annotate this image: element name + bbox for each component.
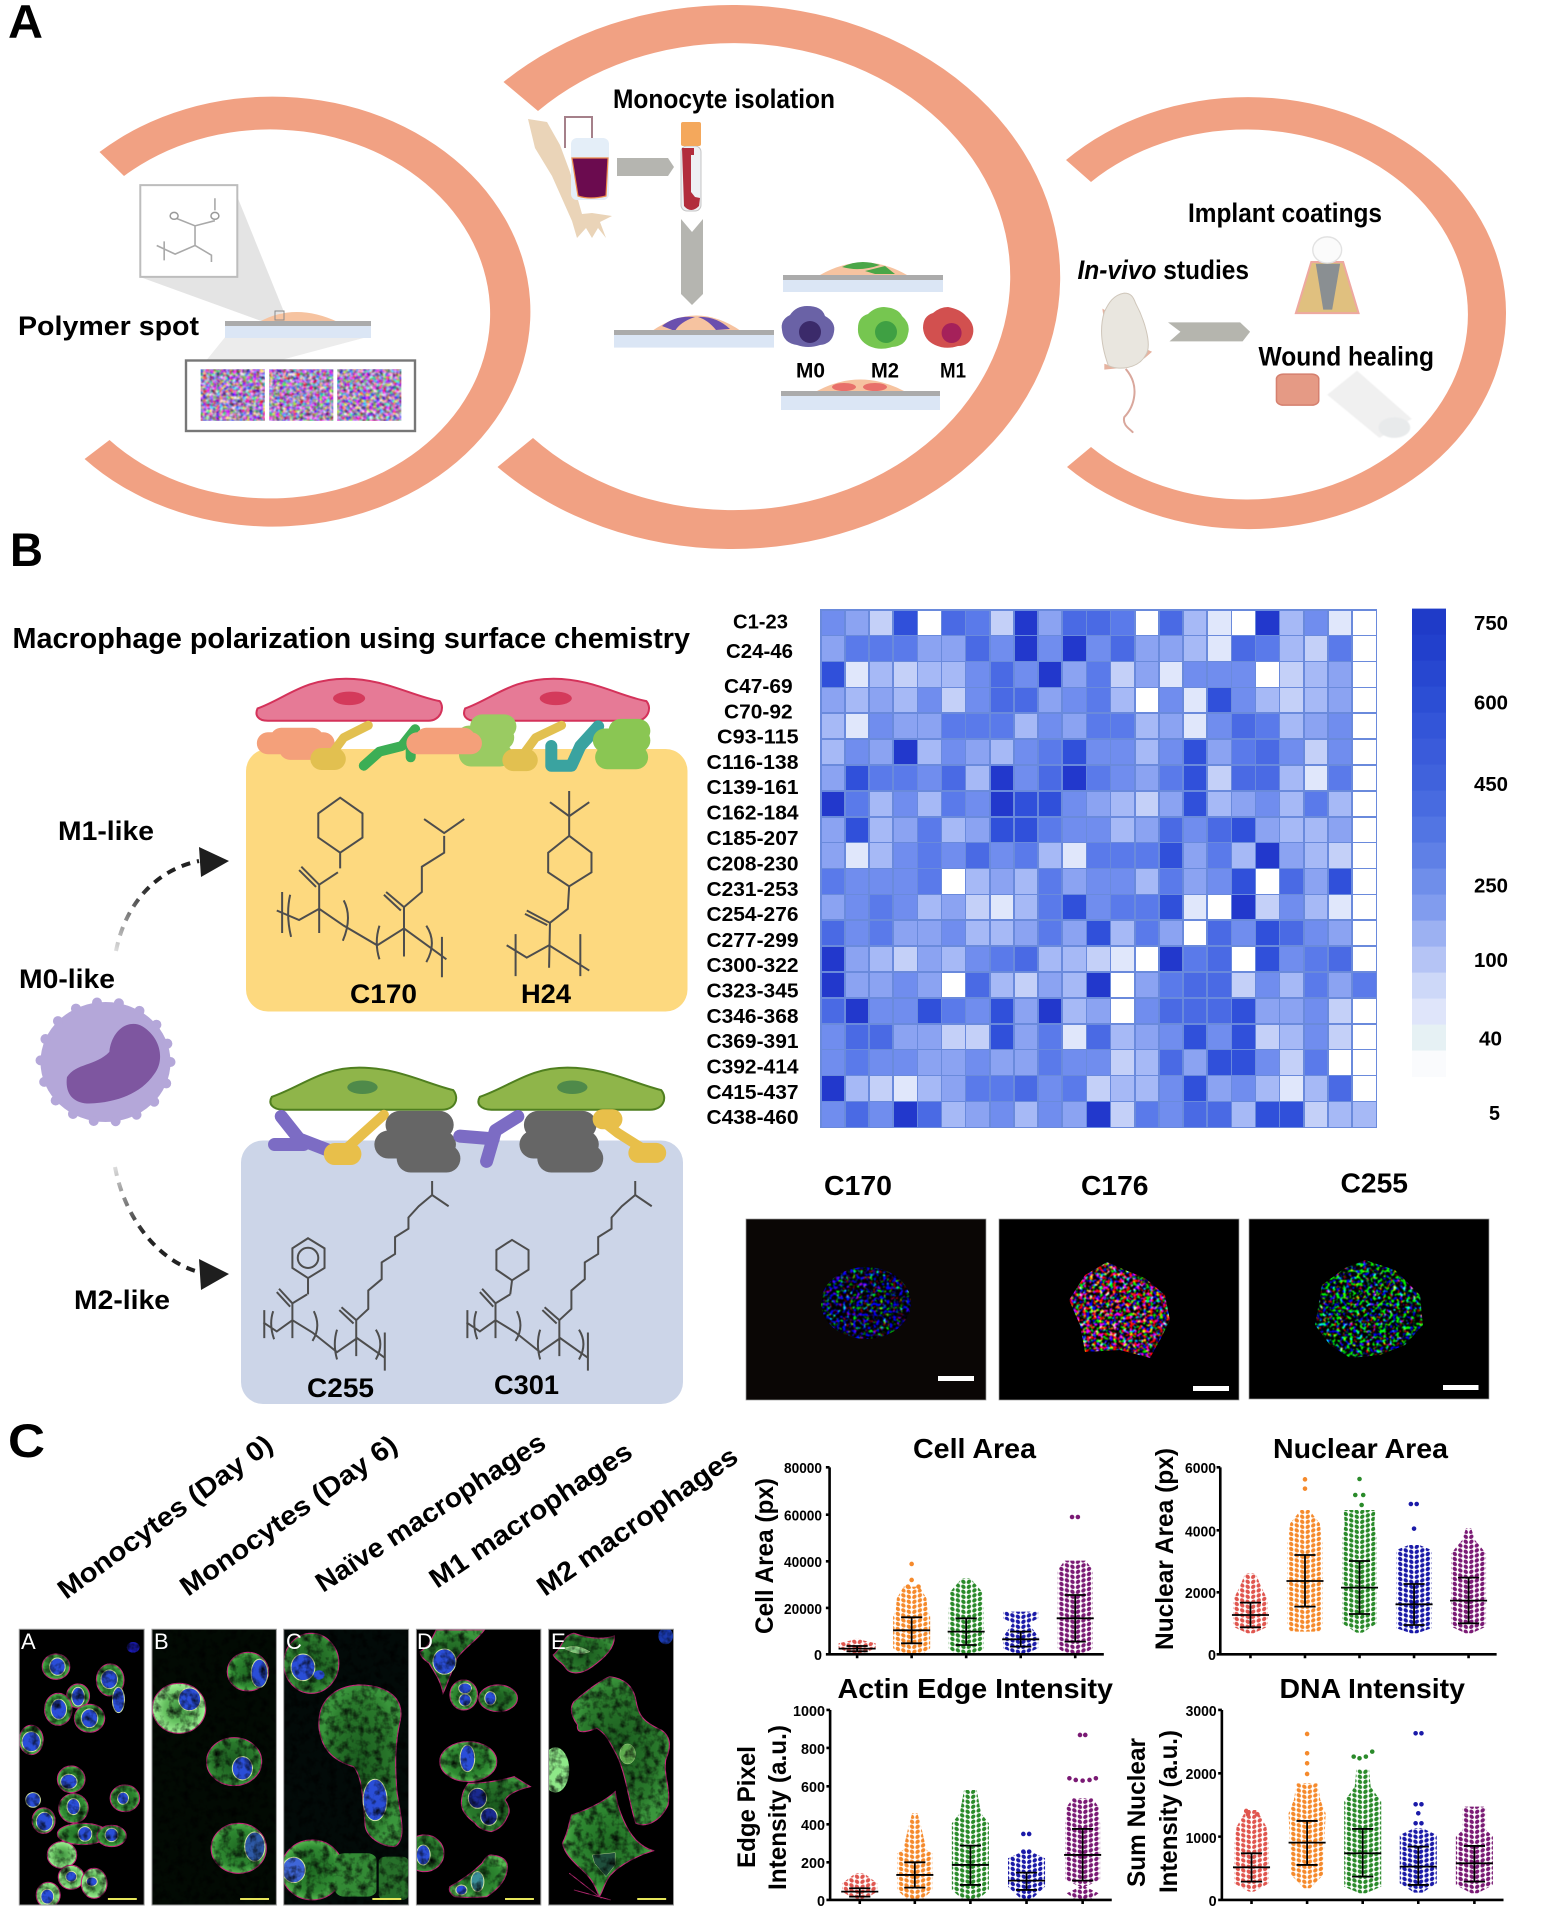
heatmap row labels: C438-460 [706,1107,798,1129]
labels: phenotype states: M1-like [58,816,154,846]
chart: Nuclear Area swarm plot [1217,1467,1497,1658]
heatmap colour bar: 100 [1474,950,1508,972]
micrograph borders, scale bars [19,1629,673,1905]
chart: Cell Area swarm plot [826,1467,1104,1658]
arrow: M0 to M2 [115,1167,229,1290]
M2 cells [270,1068,664,1110]
icon: mouse [1102,293,1152,433]
cell: M0 [782,306,834,347]
structure: C170 [277,798,464,977]
heatmap row labels: C346-368 [706,1006,798,1028]
micrograph letters: A [21,1629,36,1654]
labels: structure names: H24 [521,979,571,1009]
heatmap colour bar: 250 [1474,876,1508,898]
polymer spot on slide [225,311,371,338]
panel: M1 surface yellow [246,749,688,1012]
micrograph letters: E [551,1629,566,1654]
heatmap row labels: C231-253 [706,879,798,901]
spheroid micrograph: C170: C170 [824,1170,892,1201]
tick labels: 2000 [1186,1766,1217,1783]
heatmap row labels: C300-322 [706,955,798,977]
tick labels: 40000 [784,1554,822,1571]
panel: M2 surface blue [241,1140,683,1404]
chart titles: Nuclear Area [1273,1433,1448,1464]
label: in-vivo studies: In-vivo studies [1078,255,1249,285]
polymer microarray slide [186,360,415,431]
heatmap row labels: C139-161 [706,777,798,799]
heatmap row labels: C70-92 [724,702,793,724]
spheroid micrograph: C255 [1249,1168,1489,1399]
tick labels: 6000 [1185,1460,1216,1477]
labels: phenotype states [19,816,170,1315]
labels: phenotype states: M0-like [19,964,115,994]
chart: DNA Intensity swarm plot [1218,1710,1504,1904]
icon: blood bag [565,117,609,200]
chart titles: Actin Edge Intensity [838,1673,1113,1704]
arrow: M0 to M1 [116,847,229,951]
rotated condition labels: M1 macrophages [424,1436,638,1594]
heatmap row labels: C116-138 [706,752,798,774]
arrow: bag to tube [617,158,674,176]
y-axis titles [733,1448,1183,1893]
cell: M1 [923,307,973,348]
panel B: macrophage polarization [12,623,690,1404]
tick labels: 0 [1208,1647,1216,1664]
tick labels: 200 [801,1855,825,1872]
tick labels: 4000 [1185,1523,1216,1540]
heatmap row labels: C392-414 [706,1057,799,1079]
icon: bandage roll [1327,371,1412,438]
heading: macrophage polarization: Macrophage polarization using surface chemistry [12,623,690,655]
label: wound healing: Wound healing [1258,342,1434,372]
icon: wound dressing [1276,374,1319,405]
panel label C: C [8,1414,45,1467]
tick labels: 0 [817,1893,825,1910]
tick labels: 600 [801,1779,825,1796]
rotated condition labels: Monocytes (Day 6) [174,1429,403,1602]
labels: structure names: C170 [350,979,417,1009]
heatmap colour bar: 450 [1474,774,1508,796]
labels: macrophage phenotypes: M2 [871,360,899,382]
micrograph D [405,1629,541,1905]
labels: structure names: C301 [494,1370,559,1400]
monomer structure inset [140,185,237,277]
slide with red macrophages [781,380,940,410]
heatmap row labels: C185-207 [706,828,798,850]
M1 cells [256,679,649,721]
heatmap row labels: C208-230 [706,854,798,876]
tick labels [784,1460,1217,1910]
rotated condition labels [52,1427,743,1605]
spheroid micrograph: C176 [999,1170,1239,1400]
rotated condition labels: Naïve macrophages [310,1427,551,1598]
labels: macrophage phenotypes: M0 [796,360,825,382]
y-axis titles: Sum Nuclear [1123,1738,1151,1887]
heatmap row labels: C1-23 [733,612,788,634]
icon: blood tube [681,122,701,211]
cell: M2 [858,307,909,349]
panel A: applications ring [1066,97,1506,529]
heatmap colour bar [1412,609,1508,1125]
tick labels: 3000 [1186,1703,1217,1720]
heatmap row labels: C162-184 [706,803,799,825]
ring: middle salmon arc [498,5,1060,549]
icon: dental implant [1296,237,1359,313]
y-axis titles: Intensity (a.u.) [1155,1730,1183,1893]
micrograph letters [21,1629,566,1654]
panel A: monocyte isolation ring [498,5,1060,549]
M2 surface proteins [275,1115,656,1161]
slide with purple monocytes [614,316,774,348]
micrographs: cell morphology panels A-E [19,1628,673,1908]
labels: structure names [307,979,571,1403]
micrograph letters: D [417,1629,433,1654]
y-axis titles: Nuclear Area (px) [1151,1448,1179,1650]
y-axis titles: Cell Area (px) [751,1478,779,1634]
heatmap row labels: C323-345 [706,980,798,1002]
micrograph C [281,1629,409,1905]
spheroid micrograph: C176: C176 [1081,1170,1148,1201]
labels: macrophage phenotypes: M1 [940,360,966,382]
chart: Actin Edge Intensity swarm plot [826,1710,1112,1904]
tick labels: 60000 [784,1508,822,1525]
M1 surface proteins [268,725,638,766]
tick labels: 20000 [784,1601,822,1618]
tick labels: 0 [1209,1893,1217,1910]
heatmap row labels: C369-391 [706,1031,798,1053]
heatmap colour bar: 5 [1489,1103,1500,1125]
micrograph E [542,1628,673,1905]
micrograph letters: B [154,1629,169,1654]
ring: right salmon arc [1066,97,1506,529]
polymer zoom cones [140,196,371,375]
labels: structure names: C255 [307,1373,374,1403]
arrow: mouse to applications [1168,322,1250,341]
tick labels: 1000 [793,1703,825,1720]
heatmap row labels: C277-299 [706,930,798,952]
structure: C301 [466,1181,652,1371]
labels: phenotype states: M2-like [74,1285,170,1315]
panel A: polymer spot ring [18,97,530,527]
label: monocyte isolation: Monocyte isolation [613,84,835,114]
ring: left salmon arc [85,97,530,527]
tick labels: 400 [801,1817,825,1834]
heatmap [820,609,1377,1128]
icon: donor arm [528,119,612,238]
label: polymer spot: Polymer spot [18,311,199,341]
spheroid micrograph: C170 [746,1170,986,1400]
tick labels: 800 [801,1741,825,1758]
panel label B: B [10,523,43,576]
heatmap colour bar: 40 [1479,1029,1502,1051]
heatmap colour bar: 600 [1474,693,1508,715]
tick labels: 1000 [1186,1830,1217,1847]
chart titles [838,1433,1465,1704]
labels: macrophage phenotypes [796,360,966,382]
micrograph A [19,1629,144,1908]
heatmap row labels: C415-437 [706,1082,798,1104]
tick labels: 80000 [784,1460,822,1477]
micrograph B [152,1629,276,1905]
chart titles: DNA Intensity [1280,1673,1465,1704]
arrow: tube to slide [681,219,703,305]
micrograph letters: C [286,1629,302,1654]
cell: M0-like monocyte [40,1002,170,1122]
y-axis titles: Edge Pixel [733,1746,761,1868]
heatmap row labels: C47-69 [724,676,793,698]
heatmap row labels: C93-115 [717,727,799,749]
tick labels: 0 [814,1647,822,1664]
chart titles: Cell Area [913,1433,1036,1464]
tick labels: 2000 [1185,1585,1216,1602]
heatmap colour bar: 750 [1474,613,1508,635]
structure: H24 [507,791,591,976]
heatmap row labels: C24-46 [726,641,793,663]
heatmap row labels [706,612,799,1129]
rotated condition labels: Monocytes (Day 0) [52,1429,278,1605]
rotated condition labels: M2 macrophages [531,1441,743,1602]
y-axis titles: Intensity (a.u.) [764,1725,792,1890]
structure: C255 [263,1181,449,1371]
heatmap row labels: C254-276 [706,904,798,926]
label: implant coatings: Implant coatings [1188,198,1382,228]
spheroid micrograph: C255: C255 [1340,1168,1408,1199]
slide with green macrophages [783,262,943,292]
